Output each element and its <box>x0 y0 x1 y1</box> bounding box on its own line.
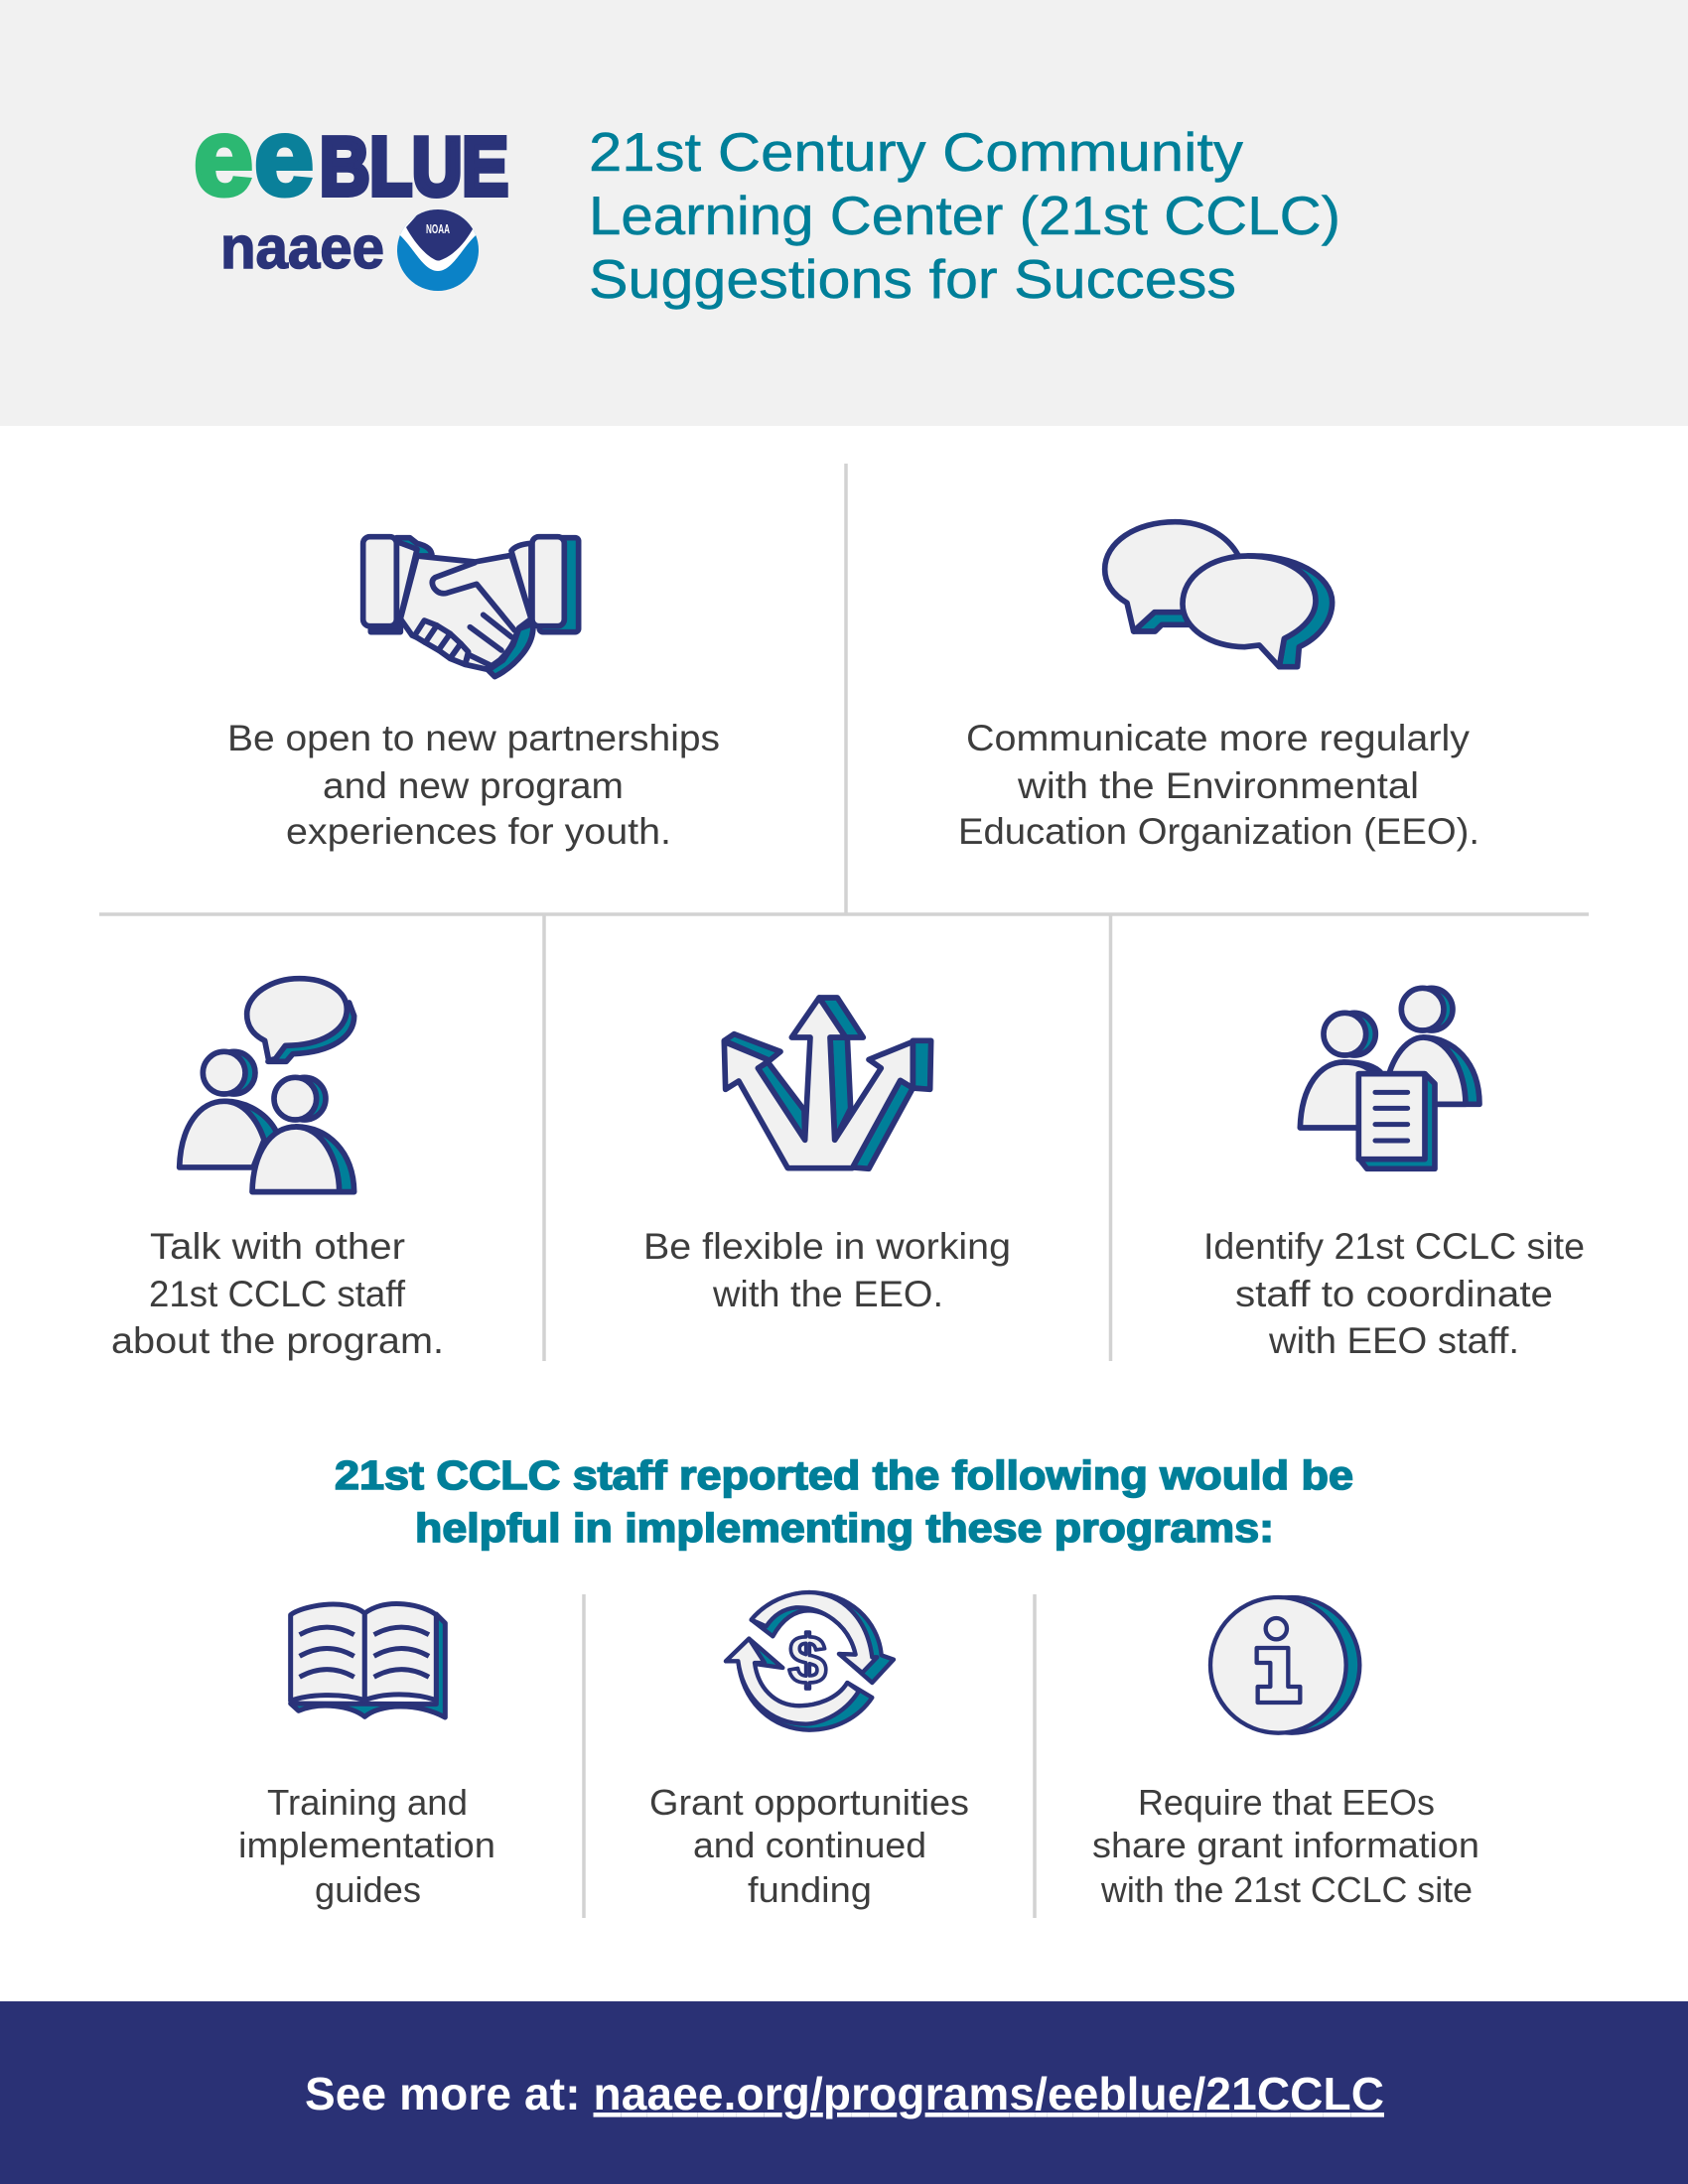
text: grant information: with the 21st CCLC site <box>1100 1869 1473 1910</box>
subheading: helpful in implementing these programs: <box>415 1505 1274 1551</box>
text: communicate: with the Environmental <box>1017 765 1419 806</box>
text: partnerships: and new program <box>323 765 624 806</box>
text: grant funding: and continued <box>693 1825 926 1865</box>
icon: two people with speech bubble <box>180 979 354 1192</box>
text: partnerships: experiences for youth. <box>286 811 671 852</box>
logo: eeBLUE <box>194 96 508 218</box>
text: grant information: share grant information <box>1092 1825 1479 1865</box>
text: be flexible: with the EEO. <box>712 1274 943 1314</box>
title: Suggestions for Success <box>589 248 1236 310</box>
title <box>589 121 1340 310</box>
panel: identify staff <box>1203 988 1585 1361</box>
text: identify staff <box>1203 1226 1585 1361</box>
text: talk with staff: about the program. <box>111 1320 444 1361</box>
title: Learning Center (21st CCLC) <box>589 185 1340 246</box>
panel: training guides <box>238 1603 495 1910</box>
text: training guides: guides <box>315 1869 421 1910</box>
logo: eeBLUE: e <box>254 96 314 218</box>
icon: diverging arrows <box>724 998 931 1168</box>
text: grant funding <box>649 1782 969 1910</box>
footer link text: See more at: naaee.org/programs/eeblue/21CCLC <box>305 2068 1384 2119</box>
text: identify staff: Identify 21st CCLC site <box>1203 1226 1585 1267</box>
text: communicate: Education Organization (EEO). <box>958 811 1479 852</box>
text: grant information <box>1092 1782 1479 1910</box>
text: talk with staff: 21st CCLC staff <box>149 1274 406 1314</box>
text: training guides <box>238 1782 495 1910</box>
footer banner <box>0 2001 1688 2184</box>
icon: information circle <box>1210 1597 1359 1733</box>
logo: NOAA emblem: NOAA <box>426 221 450 236</box>
panel: grant funding <box>649 1592 969 1910</box>
text: be flexible <box>643 1226 1011 1314</box>
text: training guides: Training and <box>267 1782 468 1823</box>
text: training guides: implementation <box>238 1825 495 1865</box>
text: identify staff: staff to coordinate <box>1235 1274 1553 1314</box>
text: be flexible: Be flexible in working <box>643 1226 1011 1267</box>
panel: talk with staff <box>111 979 444 1361</box>
text: partnerships <box>227 718 720 852</box>
icon: open book <box>291 1603 445 1717</box>
text: partnerships: Be open to new partnerships <box>227 718 720 758</box>
subheading <box>335 1452 1353 1551</box>
text: talk with staff <box>111 1226 444 1361</box>
logo: eeBLUE: e <box>194 96 253 218</box>
panel: communicate <box>958 522 1479 852</box>
text: talk with staff: Talk with other <box>150 1226 405 1267</box>
icon: dollar with circular arrows: $ <box>788 1621 827 1699</box>
text: grant information: Require that EEOs <box>1138 1782 1435 1823</box>
panel: grant information <box>1092 1597 1479 1910</box>
panel: be flexible <box>643 998 1011 1314</box>
icon: two people with document <box>1300 988 1479 1168</box>
text: grant funding: Grant opportunities <box>649 1782 969 1823</box>
logo: eeBLUE: BLUE <box>320 120 508 212</box>
icon: dollar with circular arrows <box>726 1592 894 1730</box>
icon: handshake <box>363 537 579 677</box>
text: grant funding: funding <box>748 1869 872 1910</box>
header panel <box>0 0 1688 426</box>
panel: partnerships <box>227 537 720 852</box>
text: identify staff: with EEO staff. <box>1268 1320 1519 1361</box>
text: communicate: Communicate more regularly <box>966 718 1471 758</box>
title: 21st Century Community <box>589 121 1244 183</box>
text: communicate <box>958 718 1479 852</box>
icon: speech bubbles <box>1105 522 1333 667</box>
logo: naaee: naaee <box>220 214 384 281</box>
subheading: 21st CCLC staff reported the following would be <box>335 1452 1353 1498</box>
logo: NOAA emblem <box>395 206 481 291</box>
